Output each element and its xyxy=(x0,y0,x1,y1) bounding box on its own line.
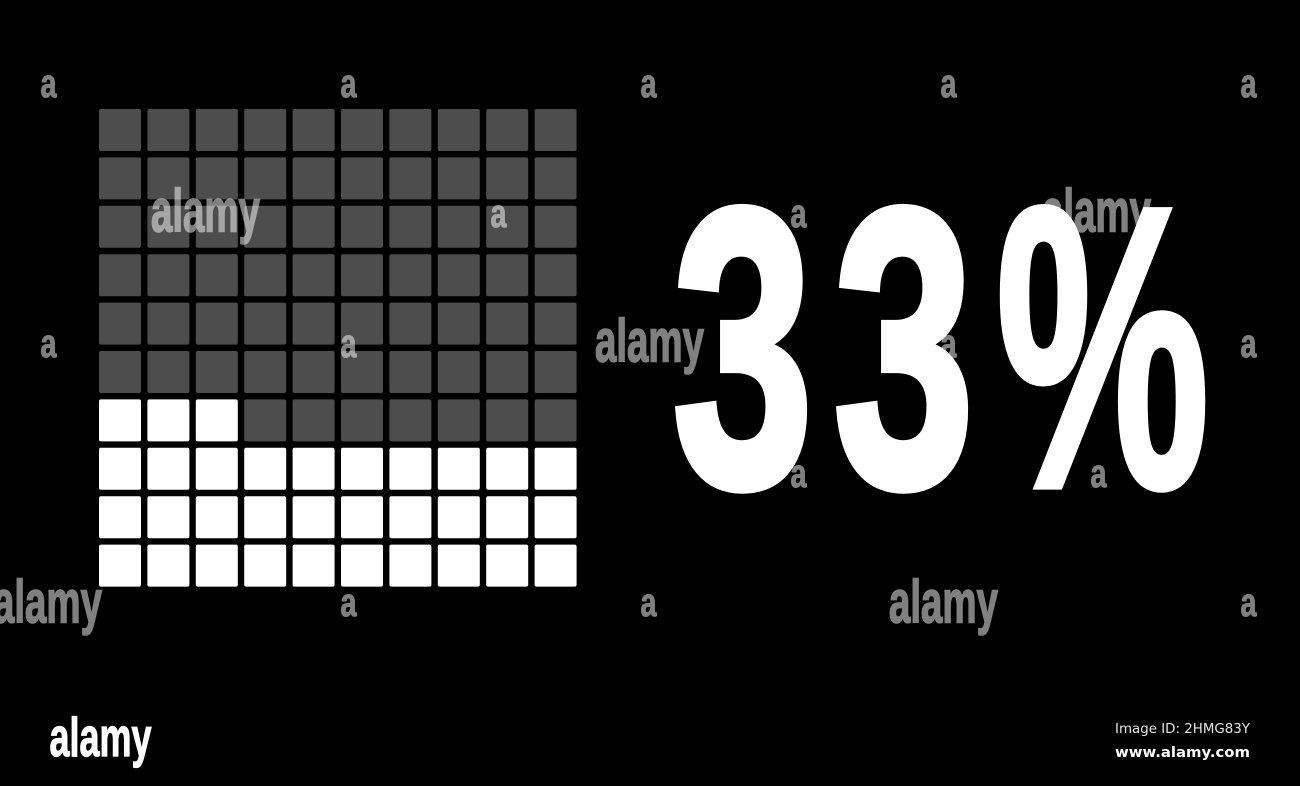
watermarks: small a marks: a xyxy=(790,192,807,236)
watermarks: small a marks: a xyxy=(1240,322,1257,366)
watermarks: large alamy: alamy xyxy=(1042,178,1151,244)
watermarks: small a marks xyxy=(40,62,1257,625)
watermarks: small a marks: a xyxy=(1240,62,1257,106)
big percentage figure xyxy=(673,123,1209,571)
waffle chart: 33 of 100 squares filled xyxy=(99,109,577,587)
watermarks: large alamy xyxy=(0,178,1151,636)
watermarks: small a marks: a xyxy=(1240,581,1257,625)
watermarks: small a marks: a xyxy=(940,322,957,366)
watermarks: small a marks: a xyxy=(340,322,357,366)
watermarks: small a marks: a xyxy=(490,192,507,236)
big percentage figure: 3 xyxy=(834,128,974,569)
watermarks: small a marks: a xyxy=(940,62,957,106)
watermarks: small a marks: a xyxy=(340,62,357,106)
watermarks: small a marks: a xyxy=(790,452,807,496)
watermarks: small a marks: a xyxy=(340,581,357,625)
watermarks: large alamy: alamy xyxy=(889,568,998,636)
watermarks: small a marks: a xyxy=(640,581,657,625)
big percentage figure: 3 xyxy=(673,128,813,569)
watermarks: small a marks: a xyxy=(1090,452,1107,496)
website url: www.alamy.com xyxy=(1115,745,1250,761)
big percentage figure: % xyxy=(996,123,1209,571)
image id text: Image ID: 2HMG83Y xyxy=(1115,722,1250,737)
logo: alamy: alamy xyxy=(50,706,152,768)
watermarks: large alamy: alamy xyxy=(595,308,704,374)
watermarks: large alamy: alamy xyxy=(151,178,260,244)
watermarks: small a marks: a xyxy=(640,62,657,106)
watermarks: small a marks: a xyxy=(40,322,57,366)
watermarks: small a marks: a xyxy=(40,62,57,106)
